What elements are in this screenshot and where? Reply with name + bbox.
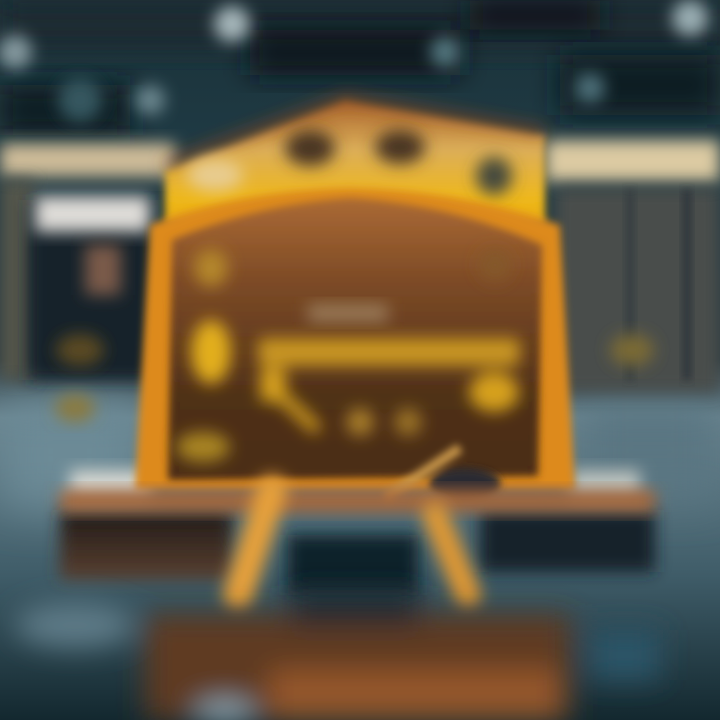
- billboard roof: [165, 98, 545, 225]
- reflection on floor: [15, 590, 660, 720]
- roof windows: [187, 130, 512, 195]
- billboard panel: [168, 198, 542, 480]
- pointer arrow on panel: [385, 448, 501, 500]
- base top strip: [60, 490, 655, 512]
- floor glow behind billboard: [70, 470, 640, 500]
- panel text: yellow blocks: [176, 249, 520, 462]
- cream light band: left: [0, 143, 175, 177]
- left background panel: [0, 180, 153, 422]
- right background panel: [555, 188, 720, 393]
- ceiling lights: [0, 0, 708, 122]
- panel headline: [308, 304, 388, 322]
- billboard base: dark bars: [60, 510, 655, 595]
- cream light band: right: [545, 140, 720, 182]
- billboard frame: [135, 188, 575, 490]
- billboard legs: [238, 490, 468, 595]
